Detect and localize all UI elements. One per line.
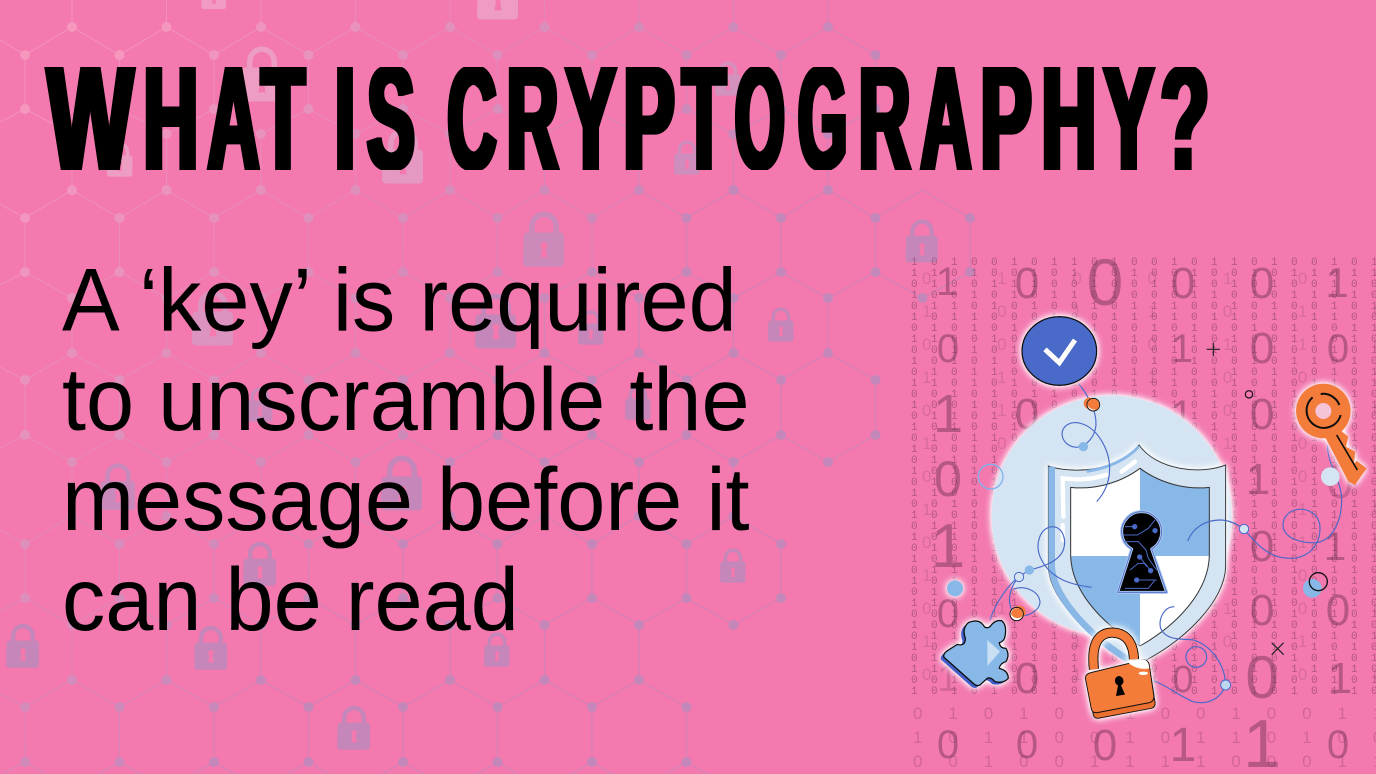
binary code rain: large digits: 0: [937, 592, 959, 636]
title: C: [448, 36, 496, 200]
binary code rain: large digits: 0: [1250, 586, 1274, 635]
title: I: [335, 36, 355, 200]
binary code rain: large digits: 0: [937, 327, 959, 371]
binary code rain: large digits: 0: [1016, 723, 1038, 767]
binary code rain: large digits: 0: [1326, 586, 1350, 635]
backdrop circle: [992, 396, 1232, 636]
binary code rain: large digits: 1: [1324, 525, 1346, 569]
binary code rain: large digits: 0: [937, 723, 959, 767]
check badge: [1022, 317, 1097, 385]
binary code rain: large digits: 0: [1250, 259, 1274, 308]
title: T: [682, 36, 726, 200]
title: G: [798, 36, 847, 200]
key: [1296, 384, 1367, 485]
binary code rain: large digits: 1: [933, 384, 963, 444]
body text: to unscramble the: [62, 351, 750, 450]
binary code rain: large digits: 0: [1327, 327, 1349, 371]
connector curves: [990, 383, 1342, 703]
binary code rain: large digits: 0: [1327, 723, 1349, 767]
body text: can be read: [62, 551, 519, 650]
binary code rain: large digits: 0: [1015, 654, 1039, 703]
binary code rain: large digits: 1: [937, 658, 959, 700]
binary code rain: large digits: 0: [1326, 453, 1354, 509]
title: H: [144, 36, 198, 200]
title: Y: [1104, 36, 1154, 200]
title: A: [208, 36, 259, 200]
title: [44, 67, 1208, 170]
binary code rain: large digits: 0: [1172, 659, 1194, 701]
binary code rain: large digits: 1: [1325, 259, 1349, 306]
binary code rain: large digits: 0: [1093, 721, 1117, 770]
binary code rain: large digits: 1: [1246, 455, 1270, 504]
binary code rain: large digits: 0: [1087, 245, 1123, 319]
background: padlock icons: [6, 0, 938, 750]
title: H: [1042, 36, 1096, 200]
binary code rain: large digits: 0: [1245, 644, 1279, 711]
binary code rain: large digits: 0: [1015, 259, 1039, 308]
connector nodes and decorative dots: [947, 343, 1340, 690]
binary code rain: large digits: 1: [936, 260, 958, 304]
body text: [62, 251, 750, 650]
padlock: [1085, 633, 1155, 718]
title: ?: [1160, 36, 1209, 200]
keyhole with circuit lines: [1118, 512, 1167, 592]
binary code rain: large digits: 1: [931, 512, 965, 581]
puzzle piece: [941, 620, 1008, 688]
binary code rain: large digits: 1: [1328, 654, 1352, 703]
shield: [1048, 445, 1226, 663]
title: R: [859, 36, 910, 200]
binary code rain: large digits: 0: [934, 451, 962, 507]
binary code rain: large digits: 1: [1171, 393, 1193, 437]
title: T: [261, 36, 305, 200]
binary code rain: large digits: 0: [1250, 324, 1274, 373]
title: O: [735, 36, 785, 200]
title: P: [980, 36, 1032, 200]
title: A: [921, 36, 971, 200]
title: P: [623, 36, 675, 200]
binary code rain: large digits: 0: [1171, 259, 1195, 308]
body text: message before it: [62, 451, 750, 550]
binary code rain: large digits: 0: [1250, 522, 1274, 571]
title: R: [507, 36, 558, 200]
title: Y: [566, 36, 616, 200]
binary code rain: large digits: 0: [1250, 390, 1274, 439]
binary code rain: large digits: 1: [1171, 327, 1193, 371]
binary code rain: large digits: 0: [1015, 390, 1039, 439]
title: S: [367, 36, 415, 200]
binary code rain: large digits: 1: [1170, 719, 1196, 772]
body text: A ‘key’ is required: [62, 251, 737, 350]
title: W: [47, 36, 133, 200]
